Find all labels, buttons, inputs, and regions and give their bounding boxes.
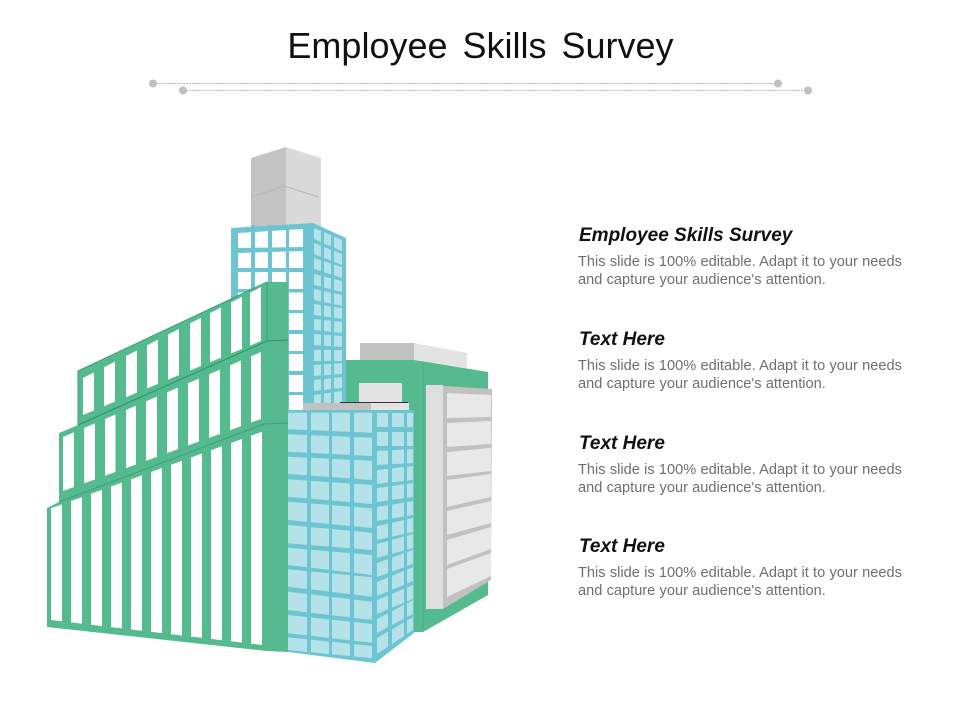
building illustration and title divider — [47, 80, 812, 663]
roof strip — [303, 402, 409, 411]
text block: text here 1: and capture your audience's attention. — [578, 376, 826, 392]
front windows — [288, 410, 372, 659]
text block: text here 1: This slide is 100% editable. Adapt it to your needs — [578, 358, 902, 374]
bottom tier windows — [51, 425, 262, 650]
text block: text here 1 — [578, 329, 902, 392]
text block: text here 3: This slide is 100% editable. Adapt it to your needs — [578, 565, 902, 581]
text block: employee skills survey — [578, 225, 902, 288]
middle tier windows — [63, 345, 261, 495]
grey side panel — [426, 385, 492, 609]
title: Employee Skills Survey — [287, 25, 674, 66]
text block: text here 2: This slide is 100% editable. Adapt it to your needs — [578, 462, 902, 478]
grey rooftop tower — [251, 147, 321, 230]
text block: employee skills survey: and capture your audience's attention. — [578, 272, 826, 288]
tower front windows — [238, 225, 303, 415]
text block: text here 1: Text Here — [579, 329, 665, 350]
tower side windows — [314, 228, 342, 410]
title divider — [149, 80, 812, 94]
rear window — [359, 383, 402, 403]
text block: text here 2 — [578, 433, 902, 496]
panel slats — [447, 393, 491, 597]
text block: text here 2: Text Here — [579, 433, 665, 454]
tier edge lines — [59, 282, 288, 502]
text block: text here 3 — [578, 536, 902, 599]
side windows — [377, 410, 413, 654]
top tier windows — [83, 280, 261, 420]
small teal building — [288, 402, 414, 663]
teal tower — [231, 223, 346, 415]
text block: employee skills survey: Employee Skills Survey — [579, 225, 792, 246]
rear roof block — [360, 343, 467, 368]
text block: text here 2: and capture your audience's attention. — [578, 480, 826, 496]
text block: text here 3: and capture your audience's attention. — [578, 583, 826, 599]
rear green building — [346, 343, 488, 632]
large green stepped building — [47, 280, 288, 652]
text block: text here 3: Text Here — [579, 536, 665, 557]
text block: employee skills survey: This slide is 100% editable. Adapt it to your needs — [578, 254, 902, 270]
